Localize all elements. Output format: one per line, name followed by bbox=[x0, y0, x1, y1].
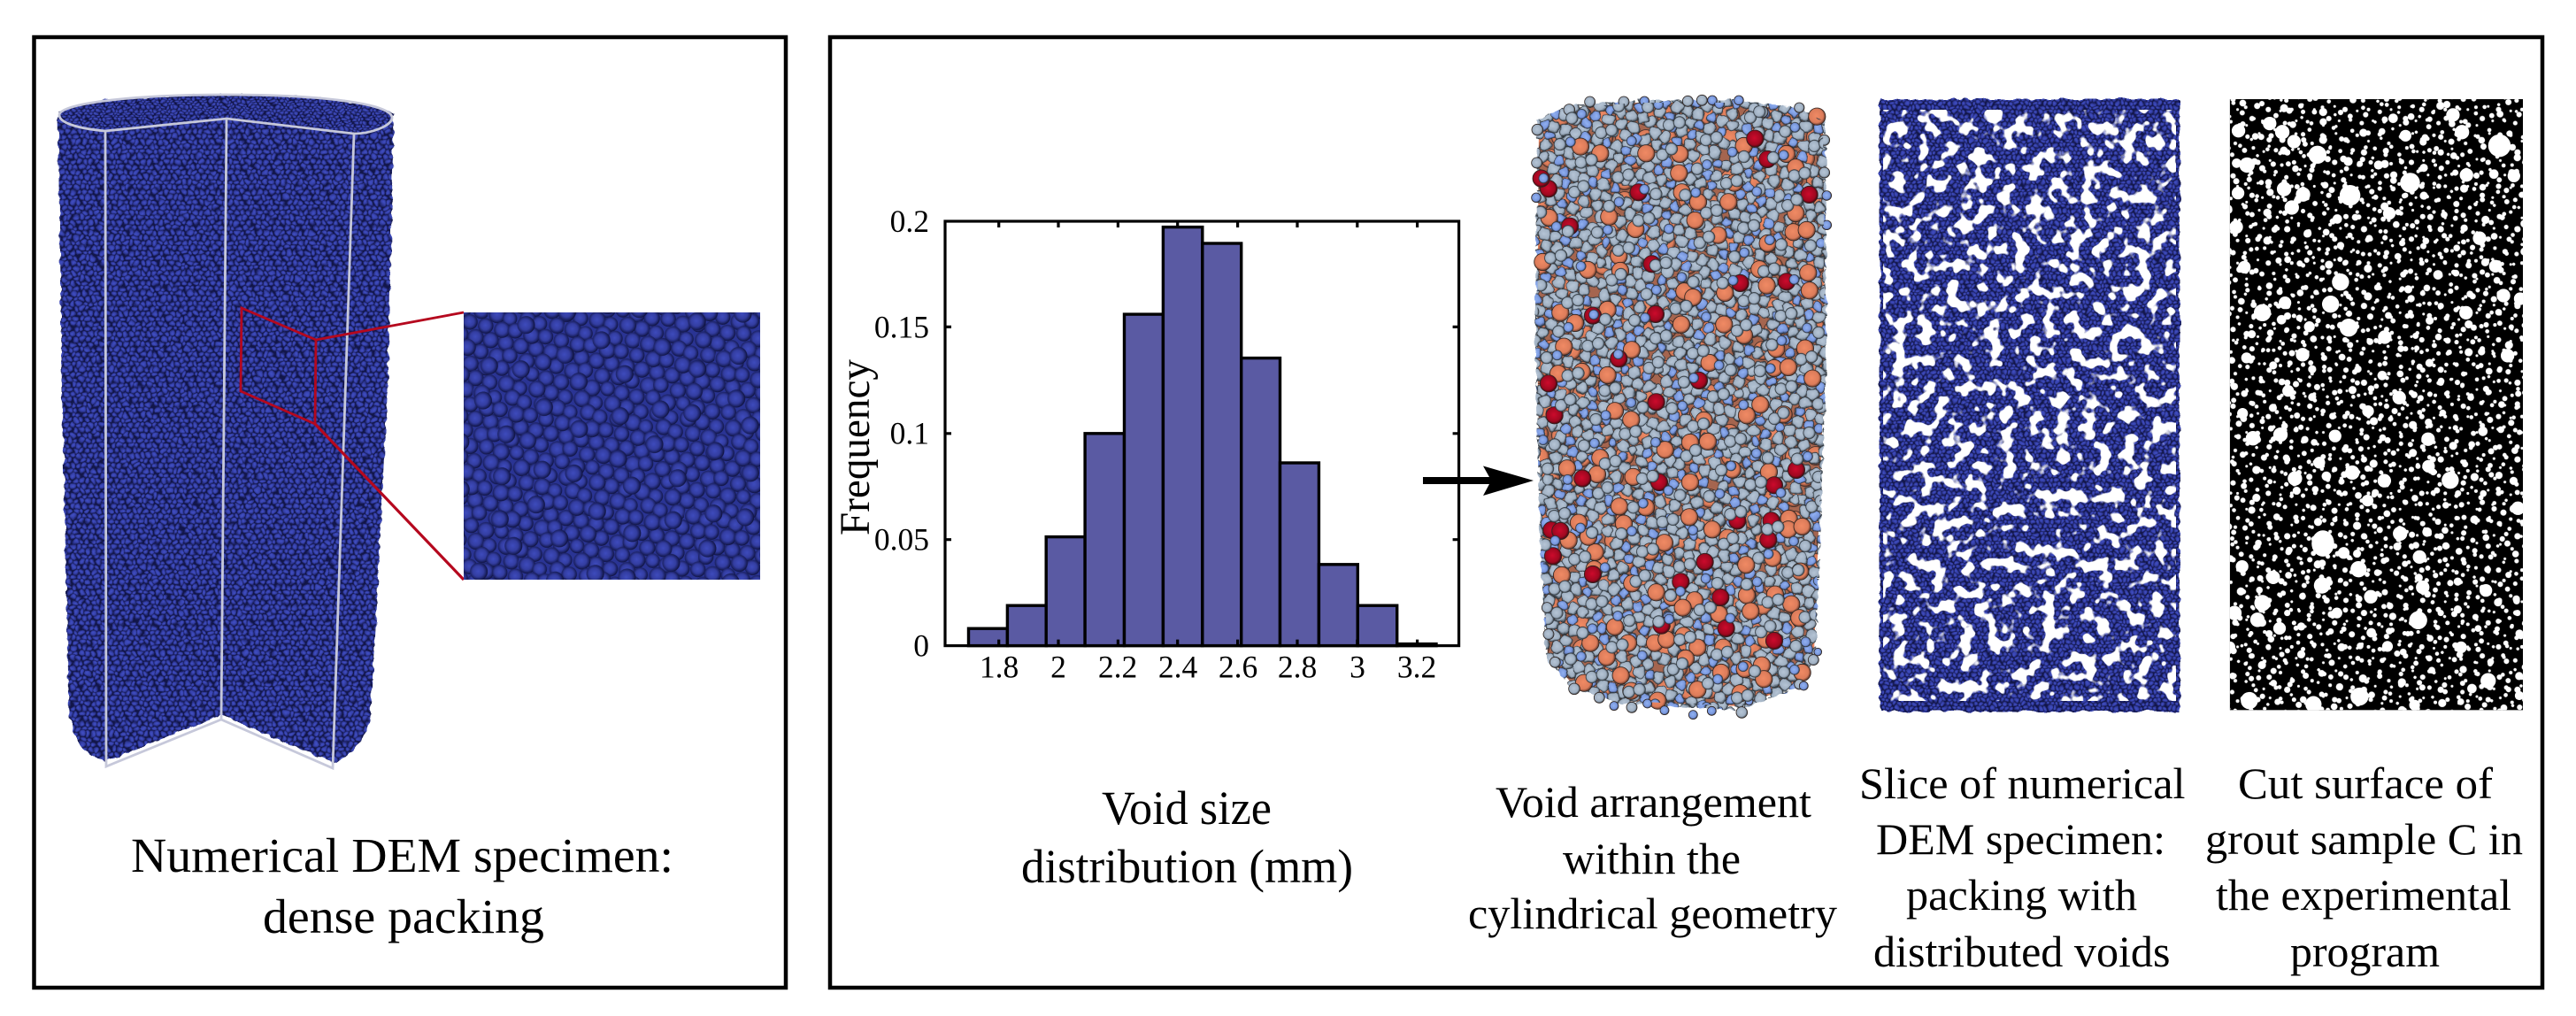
caption: slice of specimen bbox=[1859, 758, 2186, 976]
y-axis tick labels: 0.15 bbox=[874, 310, 929, 345]
caption: numerical DEM specimen: Numerical DEM specimen: bbox=[131, 828, 673, 882]
x-axis tick labels: 1.8 bbox=[980, 650, 1019, 685]
caption: numerical DEM specimen bbox=[131, 828, 673, 943]
background spheres bbox=[1535, 100, 1826, 710]
void arrangement sphere column bbox=[1532, 95, 1832, 720]
magnified inset of dense packing bbox=[464, 312, 760, 580]
x-axis tick labels: 3.2 bbox=[1397, 650, 1436, 685]
x-axis tick labels: 3 bbox=[1350, 650, 1365, 685]
y-axis tick labels bbox=[874, 204, 929, 664]
caption: void arrangement: cylindrical geometry bbox=[1468, 889, 1837, 938]
caption: cut surface of grout: the experimental bbox=[2216, 870, 2511, 920]
histogram: void size distribution bbox=[833, 204, 1459, 685]
caption: void arrangement: within the bbox=[1563, 834, 1741, 883]
histogram bars bbox=[968, 227, 1436, 646]
caption: numerical DEM specimen: dense packing bbox=[263, 889, 544, 943]
caption: void size distribution: distribution (mm) bbox=[1021, 840, 1353, 893]
packed particles bbox=[1880, 99, 2180, 712]
x-axis tick labels: 2.6 bbox=[1219, 650, 1257, 685]
y-axis tick labels: 0.1 bbox=[890, 416, 929, 451]
foreground small spheres bbox=[1537, 103, 1825, 706]
wireframe outline bbox=[59, 95, 392, 768]
white voids bbox=[2225, 99, 2526, 712]
y-axis tick labels: 0 bbox=[913, 628, 929, 664]
x-axis tick labels bbox=[980, 650, 1436, 685]
x-axis tick labels: 2.8 bbox=[1278, 650, 1317, 685]
cylindrical specimen bbox=[58, 95, 394, 768]
y-axis tick labels: 0.05 bbox=[874, 522, 929, 558]
panel frame bbox=[34, 37, 786, 988]
y-axis tick labels: 0.2 bbox=[890, 204, 929, 239]
x-axis tick labels: 2.2 bbox=[1098, 650, 1137, 685]
caption: cut surface of grout bbox=[2205, 758, 2523, 976]
x-axis tick labels: 2.4 bbox=[1158, 650, 1197, 685]
caption: slice of specimen: DEM specimen: bbox=[1876, 814, 2165, 864]
panel: numerical DEM specimen bbox=[34, 37, 786, 988]
caption: void size distribution: Void size bbox=[1102, 781, 1272, 835]
caption: void arrangement bbox=[1468, 777, 1837, 938]
panel: void modelling workflow bbox=[830, 37, 2542, 988]
caption: cut surface of grout: grout sample C in bbox=[2205, 814, 2523, 864]
slice of numerical DEM specimen bbox=[1880, 99, 2180, 712]
y-axis title: Frequency bbox=[833, 359, 879, 535]
caption: void arrangement: Void arrangement bbox=[1496, 777, 1811, 827]
large orange and red voids, lower bbox=[1542, 498, 1822, 720]
specimen body bbox=[58, 103, 394, 763]
magnified region marker bbox=[241, 308, 464, 580]
large orange and red voids, upper bbox=[1532, 95, 1832, 494]
x-axis tick labels: 2 bbox=[1050, 650, 1066, 685]
panel frame bbox=[830, 37, 2542, 988]
caption: cut surface of grout: Cut surface of bbox=[2238, 758, 2493, 808]
caption: slice of specimen: packing with bbox=[1906, 870, 2137, 920]
arrow from histogram to void arrangement bbox=[1423, 466, 1534, 496]
specimen top surface bbox=[59, 95, 392, 134]
caption: cut surface of grout: program bbox=[2290, 927, 2440, 976]
caption: void size distribution bbox=[1021, 781, 1353, 893]
cut surface of grout sample bbox=[2225, 99, 2526, 712]
distributed void gaps bbox=[1883, 110, 2176, 701]
caption: slice of specimen: distributed voids bbox=[1873, 927, 2170, 976]
black grout matrix bbox=[2230, 99, 2523, 710]
chart axes and ticks bbox=[945, 221, 1459, 646]
caption: slice of specimen: Slice of numerical bbox=[1859, 758, 2186, 808]
